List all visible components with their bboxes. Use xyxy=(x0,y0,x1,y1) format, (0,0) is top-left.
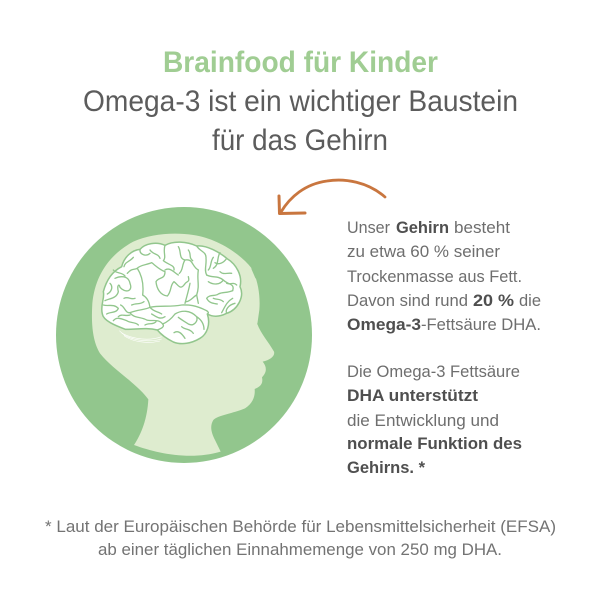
text block: brain fat content: Omega-3 xyxy=(347,315,421,334)
brain xyxy=(102,242,242,344)
hair notch lines xyxy=(252,268,262,324)
text block: brain fat content: 20 % xyxy=(473,291,514,310)
illustration: child head with brain in green circle xyxy=(56,207,312,463)
text block: brain fat content: Unser xyxy=(347,218,390,237)
footnote: * Laut der Europäischen Behörde für Lebensmittelsicherheit (EFSA) xyxy=(45,517,556,536)
subtitle: Omega-3 building block: für das Gehirn xyxy=(212,124,388,157)
subtitle: Omega-3 building block xyxy=(83,85,518,157)
child head silhouette xyxy=(92,234,274,456)
text block: DHA function: die Entwicklung und xyxy=(347,411,499,430)
text block: DHA function: normale Funktion des xyxy=(347,434,522,453)
text block: brain fat content: die xyxy=(519,291,541,310)
subtitle: Omega-3 building block: Omega-3 ist ein wichtiger Baustein xyxy=(83,85,518,118)
text block: brain fat content: besteht xyxy=(454,218,510,237)
text block: brain fat content: -Fettsäure DHA. xyxy=(421,315,541,334)
green circle background xyxy=(56,207,312,463)
text block: brain fat content xyxy=(347,218,541,334)
arrow: curved orange arrow pointing to the head xyxy=(279,180,385,214)
text block: brain fat content: Davon sind rund xyxy=(347,291,468,310)
text block: DHA function: DHA unterstützt xyxy=(347,386,478,405)
title: Brainfood für Kinder: Brainfood für Kinder xyxy=(163,46,438,79)
footnote: ab einer täglichen Einnahmemenge von 250 mg DHA. xyxy=(98,540,502,559)
brain folds xyxy=(103,245,237,338)
text block: brain fat content: Trockenmasse aus Fett. xyxy=(347,267,522,286)
text block: brain fat content: zu etwa 60 % seiner xyxy=(347,242,500,261)
brain outline xyxy=(102,242,242,344)
text block: DHA function: Gehirns. * xyxy=(347,458,425,477)
text block: DHA function xyxy=(347,362,522,477)
text block: DHA function: Die Omega-3 Fettsäure xyxy=(347,362,520,381)
footnote xyxy=(45,517,556,559)
brain stem arcs xyxy=(119,331,162,342)
text block: brain fat content: Gehirn xyxy=(396,218,449,237)
